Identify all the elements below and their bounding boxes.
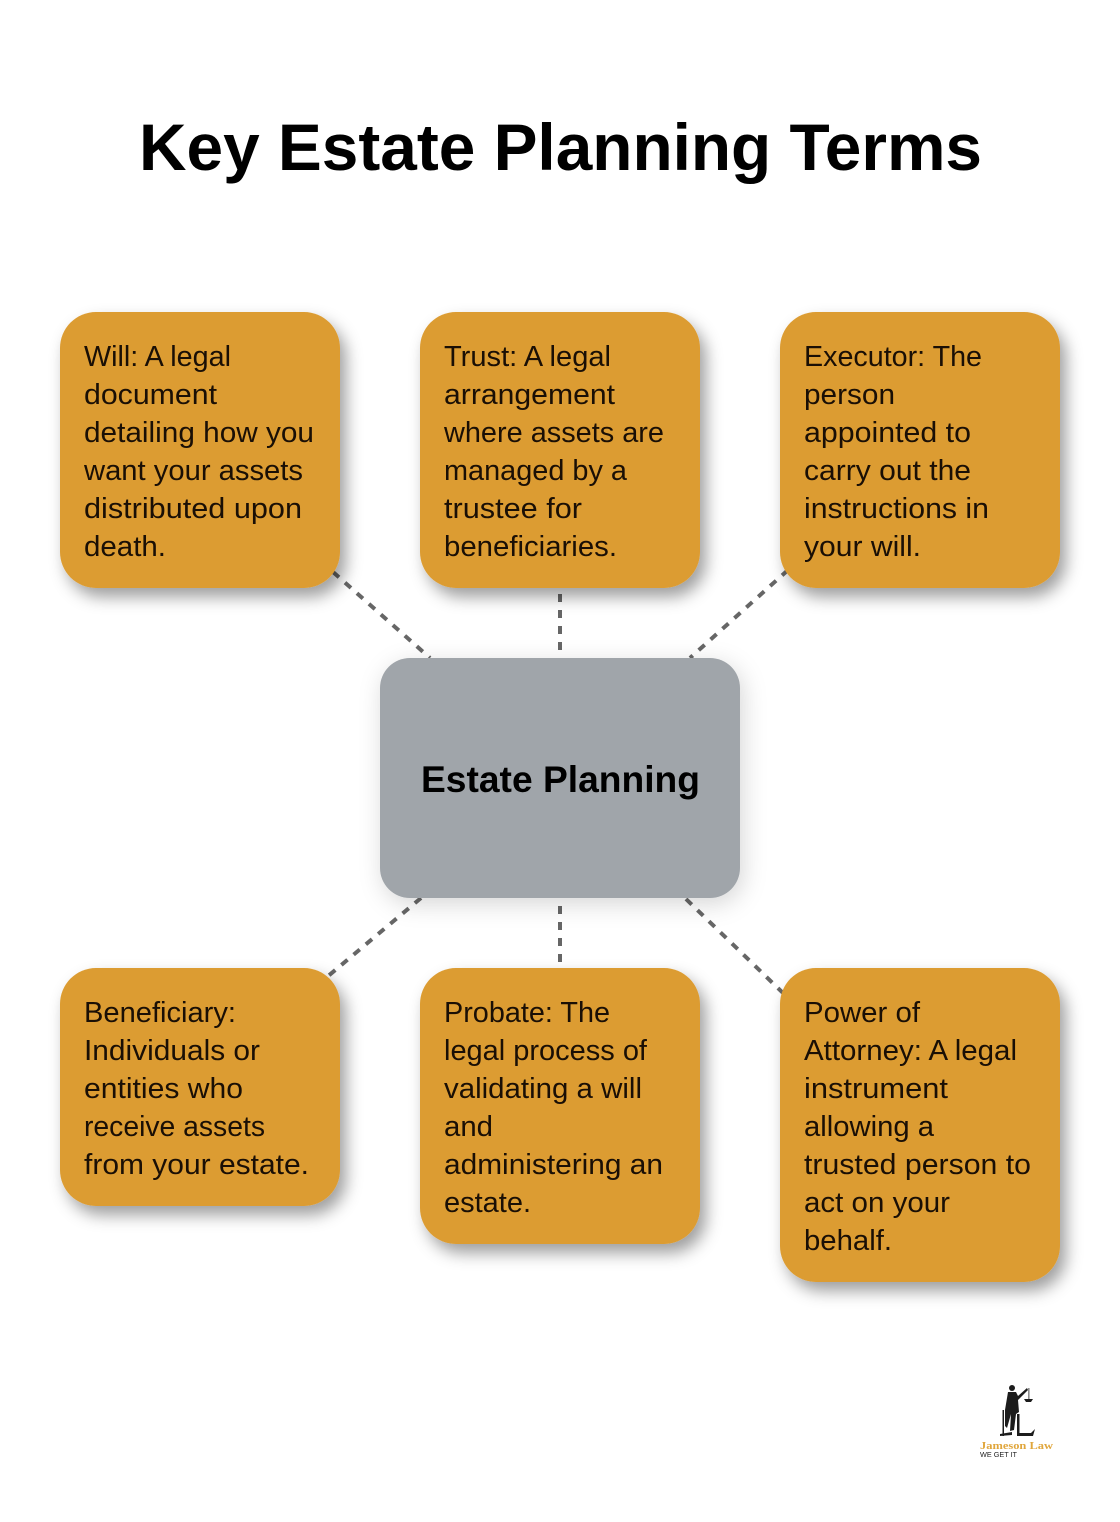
panel: executor: your will. (804, 531, 921, 563)
panel: will (60, 312, 340, 588)
panel: executor: Executor: The (804, 341, 982, 373)
panel: probate: and (444, 1111, 493, 1143)
panel: beneficiary: entities who (84, 1073, 243, 1105)
panel: probate (420, 968, 700, 1244)
panel: power of attorney: Attorney: A legal (804, 1035, 1017, 1067)
panel: will: detailing how you (84, 417, 314, 449)
panel: trust: Trust: A legal (444, 341, 611, 373)
panel: trust: trustee for (444, 493, 582, 525)
panel: executor: person (804, 379, 895, 411)
panel: estate planning centre: Estate Planning (421, 759, 700, 800)
connector: power of attorney to centre (686, 899, 783, 993)
panel: power of attorney: allowing a (804, 1111, 935, 1143)
panel: executor: appointed to (804, 417, 971, 449)
title: Key Estate Planning Terms (139, 110, 982, 184)
panel: trust (420, 312, 700, 588)
panel: power of attorney: Power of (804, 997, 921, 1029)
panel: beneficiary: Beneficiary: (84, 997, 236, 1029)
connector: beneficiary to centre (327, 898, 421, 977)
panel: power of attorney (780, 968, 1060, 1282)
logo name: Jameson Law (980, 1441, 1054, 1452)
panel: trust: where assets are (443, 417, 664, 449)
logo: Jameson Law (980, 1385, 1054, 1459)
panel: trust: beneficiaries. (444, 531, 617, 563)
logo tagline: WE GET IT (980, 1452, 1018, 1459)
panel: beneficiary: Individuals or (84, 1035, 260, 1067)
connector: trust to centre (558, 594, 562, 650)
connector: will to centre (333, 572, 430, 658)
panel: probate: validating a will (444, 1073, 642, 1105)
panel: will: want your assets (83, 455, 303, 487)
panel: power of attorney: act on your (804, 1187, 950, 1219)
panel: will: death. (84, 531, 166, 563)
panel: executor: instructions in (804, 493, 989, 525)
connector: probate to centre (558, 906, 562, 962)
icon: lady justice (1000, 1385, 1035, 1436)
panel: executor (780, 312, 1060, 588)
panel: power of attorney: instrument (804, 1073, 948, 1105)
panel: probate: Probate: The (444, 997, 610, 1029)
connector: executor to centre (690, 570, 788, 658)
panel: power of attorney: trusted person to (804, 1149, 1031, 1181)
panel: will: distributed upon (84, 493, 302, 525)
panel: estate planning centre (380, 658, 740, 898)
panel: will: document (84, 379, 217, 411)
panel: power of attorney: behalf. (804, 1225, 892, 1257)
panel: beneficiary: from your estate. (84, 1149, 309, 1181)
panel: will: Will: A legal (84, 341, 231, 373)
panel: probate: administering an (444, 1149, 663, 1181)
panel: trust: arrangement (444, 379, 615, 411)
panel: executor: carry out the (804, 455, 971, 487)
panel: probate: legal process of (444, 1035, 648, 1067)
panel: beneficiary: receive assets (84, 1111, 265, 1143)
panel: beneficiary (60, 968, 340, 1206)
panel: probate: estate. (444, 1187, 531, 1219)
panel: trust: managed by a (444, 455, 628, 487)
